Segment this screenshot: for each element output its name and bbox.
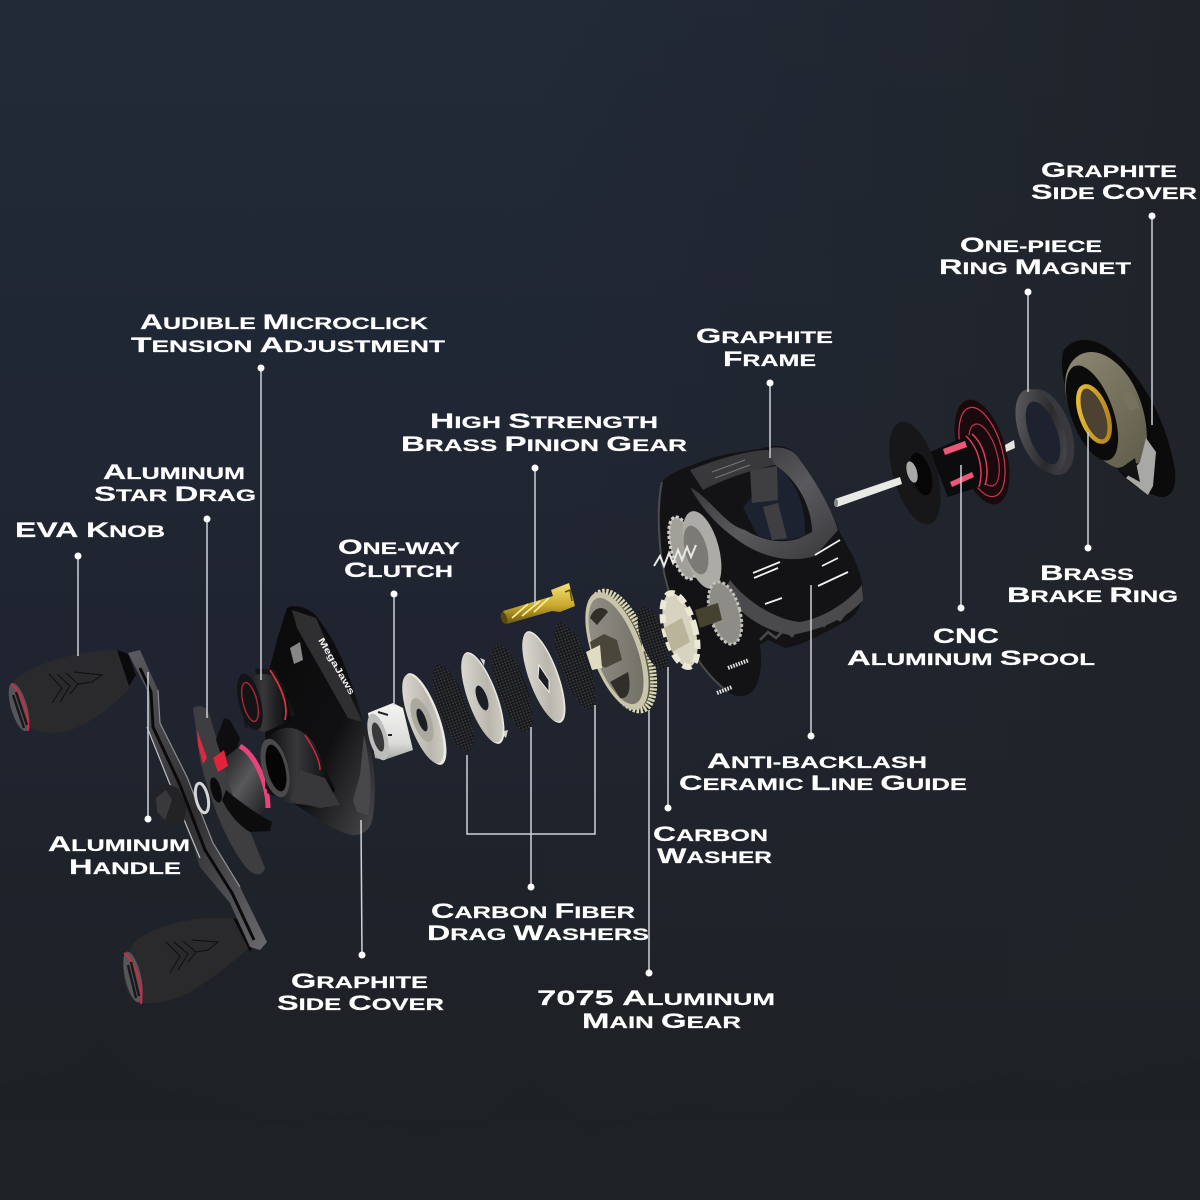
label: aluminum star drag: A LUMINUM — [103, 461, 245, 484]
label: audible microclick tension adjustment: A UDIBLE M ICROCLICK — [140, 311, 428, 334]
label: 7075 aluminum main gear — [537, 987, 775, 1033]
label: graphite side cover (right) — [1031, 159, 1197, 204]
label: anti-backlash ceramic line guide: A NTI-BACKLASH — [707, 750, 927, 773]
label: one-piece ring magnet — [939, 234, 1131, 279]
label: one-way clutch: O NE-WAY — [338, 536, 460, 559]
label: one-way clutch — [338, 536, 460, 582]
leader: carbon fiber drag washers bracket — [467, 705, 595, 890]
label: high strength brass pinion gear: H IGH S TRENGTH — [430, 410, 658, 433]
label: EVA knob: EVA K NOB — [15, 519, 165, 542]
label: aluminum star drag — [94, 461, 256, 506]
label: one-piece ring magnet: R ING M AGNET — [939, 256, 1131, 279]
label: aluminum handle: A LUMINUM — [48, 833, 190, 856]
label: brass brake ring: B RASS — [1040, 562, 1134, 585]
component: upper handle knob — [4, 650, 136, 733]
leader: graphite side cover (right) — [1148, 212, 1156, 425]
component: lower handle knob — [119, 918, 256, 1004]
label: anti-backlash ceramic line guide: C ERAMIC L INE G UIDE — [679, 772, 967, 795]
label: 7075 aluminum main gear: M AIN G EAR — [582, 1010, 741, 1033]
component: main gear — [572, 584, 667, 718]
label: anti-backlash ceramic line guide — [679, 750, 967, 795]
leader: one-piece ring magnet — [1024, 288, 1032, 392]
component: metal washer one — [394, 668, 455, 770]
component: carbon washer one — [424, 660, 482, 756]
component: spool shaft — [834, 477, 902, 507]
leader: ceramic line guide — [808, 585, 814, 740]
label: aluminum star drag: S TAR D RAG — [94, 483, 256, 506]
component: graphite frame with gears — [654, 446, 863, 696]
leader: pinion gear — [532, 464, 538, 605]
label: brass brake ring: B RAKE R ING — [1007, 584, 1178, 607]
component: carbon washer three — [546, 618, 604, 714]
label: carbon washer: C ARBON — [653, 823, 768, 846]
leader: graphite side cover (left) — [358, 820, 366, 958]
label: graphite frame — [696, 325, 833, 371]
label: carbon fiber drag washers: C ARBON F IBER — [431, 900, 635, 923]
leader: main gear — [646, 710, 652, 976]
label: graphite side cover (left) — [277, 970, 444, 1015]
label: one-way clutch: C LUTCH — [344, 559, 453, 582]
component: aluminum handle arm — [128, 650, 267, 950]
label: audible microclick tension adjustment: T ENSION A DJUSTMENT — [131, 334, 445, 357]
label: graphite frame: F RAME — [723, 348, 816, 371]
label: high strength brass pinion gear: B RASS P INION G EAR — [401, 433, 687, 456]
label: graphite side cover (left): G RAPHITE — [291, 970, 428, 993]
component: CNC aluminum spool — [879, 393, 1020, 530]
label: audible microclick tension adjustment — [131, 311, 445, 357]
leader: aluminum handle — [144, 672, 152, 822]
component: aluminum star drag — [193, 706, 272, 874]
label: carbon washer — [653, 823, 772, 868]
label: carbon washer: W ASHER — [657, 845, 772, 868]
label: CNC aluminum spool: CNC — [933, 625, 999, 648]
label: CNC aluminum spool — [847, 625, 1095, 670]
label: graphite side cover (left): S IDE C OVER — [277, 992, 444, 1015]
label: graphite side cover (right): G RAPHITE — [1041, 159, 1177, 182]
leader: CNC aluminum spool — [958, 465, 964, 612]
component: metal washer three — [514, 626, 574, 728]
label: carbon fiber drag washers — [427, 900, 649, 945]
label: aluminum handle: H ANDLE — [69, 856, 181, 879]
leader: star drag — [204, 516, 210, 718]
label: one-piece ring magnet: O NE-PIECE — [960, 234, 1102, 257]
component: carbon washer two — [483, 640, 541, 736]
label: aluminum handle — [48, 833, 190, 879]
component: brass pinion gear — [499, 583, 575, 625]
label: 7075 aluminum main gear: 7075 A LUMINUM — [537, 987, 775, 1010]
component: carbon washer four — [631, 603, 675, 673]
label: high strength brass pinion gear — [401, 410, 687, 456]
label: brass brake ring — [1007, 562, 1178, 607]
label: carbon fiber drag washers: D RAG W ASHERS — [427, 922, 649, 945]
leader: graphite frame — [766, 380, 774, 458]
label: CNC aluminum spool: A LUMINUM S POOL — [847, 647, 1095, 670]
component: one-way clutch — [363, 703, 413, 763]
text: MegaJaws brand: MegaJaws — [316, 636, 357, 696]
component: graphite side cover with tension knobs — [232, 606, 375, 835]
leader: tension adjustment — [258, 364, 264, 680]
component: metal washer two — [453, 647, 513, 749]
label: graphite frame: G RAPHITE — [696, 325, 833, 348]
leader: carbon washer — [664, 667, 672, 812]
label: graphite side cover (right): S IDE C OVER — [1031, 181, 1197, 204]
component: one-piece ring magnet — [1005, 382, 1085, 482]
leader: brass brake ring — [1084, 432, 1092, 552]
leader: EVA knob — [74, 552, 82, 656]
component: graphite side cover with brass brake ring — [1055, 340, 1175, 497]
leader: one-way clutch — [390, 590, 398, 705]
